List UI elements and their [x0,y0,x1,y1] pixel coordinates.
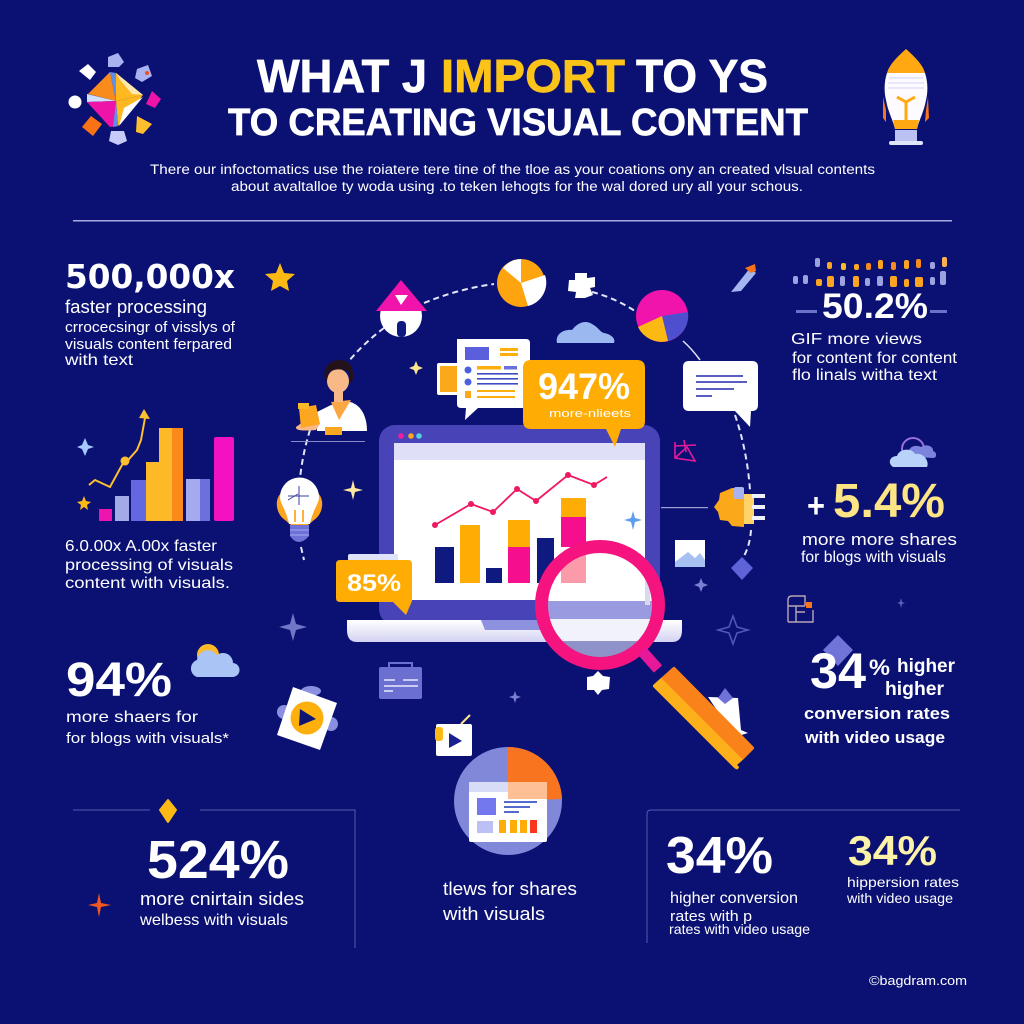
stat: 50.2%: for content for content [792,350,958,367]
icon: kite [823,635,853,666]
stat: 500,000x: with text [64,352,134,369]
icon: cloud [557,322,614,343]
sparkle: yellow small [409,361,423,375]
source credit: ©bagdram.com [869,973,967,988]
stat: 34% white [666,827,810,937]
intro text [150,162,875,194]
title: TO CREATING VISUAL CONTENT [228,102,808,144]
sparkle: diamond [731,557,753,580]
stat: +5.4%: 5.4% [833,475,945,528]
stat: 34% yellow: 34% [848,827,937,874]
icon: gear plug [661,487,765,527]
title: WHAT J [257,50,427,102]
screen line chart [432,472,607,528]
stat: 34% higher: % [869,655,890,680]
stat: 94%: 94% [66,654,172,707]
icon: small video card [435,715,472,756]
stat: 34% higher: 34 [810,643,866,699]
stat: 34% yellow: with video usage [846,890,953,906]
panel: 524% frame [73,800,355,948]
stat: 500,000x: 500,000x [65,257,235,296]
callout: 85%: 85% [347,570,401,597]
stat: 34% white: rates with p [670,908,752,925]
stat: 34% white: 34% [666,827,773,885]
stat: +5.4%: more more shares [802,531,957,549]
icon: person with clipboard [291,360,367,442]
icon: orange cross [88,893,111,917]
stat: 500,000x: faster processing [65,297,207,317]
sparkle: center small [509,691,521,703]
pie icon: orange [497,259,546,307]
pie icon: magenta [636,290,688,342]
stat: 34% higher [804,643,956,747]
callout: 947%: 947% [538,366,630,407]
stat: 524%: more cnirtain sides [140,889,304,909]
icon: picture card [675,540,705,567]
stat: 524% [139,830,304,929]
sparkle: periwinkle small [694,578,708,592]
stat: 50.2%: GIF more views [791,331,922,348]
stat: faster processing: content with visuals. [65,575,230,592]
stat: 34% higher: with video usage [804,728,945,747]
title: TO YS [636,50,768,102]
sparkle: outline [718,616,748,644]
icon: lightbulb rocket [883,49,929,145]
intro text: There our infoctomatics use the roiatere tere tine of the tloe as your coations ony an created vlsual contents [150,162,875,177]
stat: 94%: for blogs with visuals* [66,730,229,747]
stat: 34% white: rates with video usage [669,921,810,937]
stat: 50.2%: 50.2% [822,287,928,326]
magnifying glass [540,545,752,767]
stat: 50.2% [791,287,958,384]
panel: bottom right frame [647,810,960,943]
callout: 947%: more-nlieets [549,408,632,420]
icon: pen [731,264,756,292]
stat: center shares: with visuals [442,904,545,924]
sparkle: yellow large [343,480,363,500]
icon: small triangle chart [675,440,696,461]
stat: 34% yellow [846,827,959,906]
stat: 34% yellow: hippersion rates [847,874,959,890]
icon: white badge [587,671,610,695]
stat: 94% [66,654,229,747]
icon: lightbulb [277,478,322,542]
icon: star [265,263,295,291]
icon: video card [277,686,338,750]
icon: speech bubble right [683,361,758,427]
stat: faster processing: processing of visuals [65,557,233,574]
stat: 500,000x: visuals content ferpared [65,336,232,353]
stat: faster processing: 6.0.00x A.00x faster [65,538,218,555]
stat: 34% higher: conversion rates [804,704,950,723]
tiny icon rows [793,257,947,287]
stat: 500,000x [64,257,236,369]
stat: 34% higher: higher [885,679,945,700]
stat: 34% higher: higher [897,656,956,677]
icon: puzzle piece [568,273,595,298]
stat: 94%: more shaers for [66,709,199,726]
icon: diamond badge [160,800,176,822]
stat: center shares: tlews for shares [443,879,577,899]
icon: sun and cloud [191,644,240,677]
stat: 34% white: higher conversion [670,890,798,907]
dashed connector arc [300,284,751,560]
stat: 500,000x: crrocecsingr of visslys of [65,319,236,336]
stat: +5.4%: + [807,487,825,525]
sparkle: tiny [897,598,905,608]
stat: +5.4%: for blogs with visuals [801,549,946,566]
callout: 947% [523,360,645,447]
icon: house [376,280,427,337]
icon: star burst with gems [68,53,161,145]
stat: 50.2%: flo linals witha text [792,367,938,384]
icon: double cloud [890,438,936,467]
icon: white shape with kite [708,688,748,737]
stat: 524%: 524% [147,830,289,890]
sparkle: left [279,613,307,641]
sparkle: blue [624,511,642,530]
stat: faster processing [65,538,233,592]
bar chart with trend arrow [77,409,234,521]
icon: briefcase [379,663,422,699]
icon: floor plan [788,596,813,622]
stat: 524%: welbess with visuals [139,912,288,929]
pie with dashboard card [454,747,562,855]
icon: document speech bubble [437,339,530,420]
stat: center shares [442,879,577,924]
intro text: about avaltalloe ty woda using .to teken lehogts for the wal dored ury all your schous. [231,179,803,194]
laptop [347,425,682,642]
title: IMPORT [441,50,625,102]
callout: 85% [336,554,412,615]
stat: +5.4% [801,475,957,566]
screen bar chart [435,498,586,583]
title [228,50,808,144]
